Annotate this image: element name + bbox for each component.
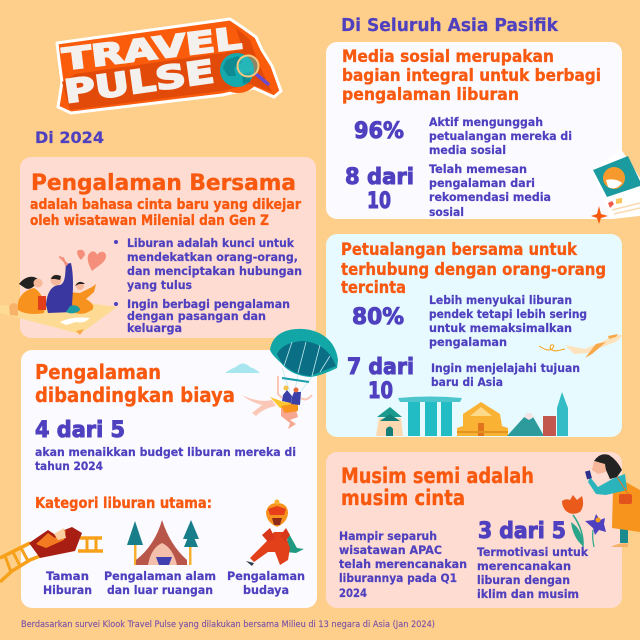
stat: 7 dari 10: 10 <box>368 379 393 404</box>
stat description: 3 dari 5: Termotivasi untuk <box>477 545 588 559</box>
panel heading: bagian integral untuk berbagi <box>342 66 601 86</box>
panel heading: oleh wisatawan Milenial dan Gen Z <box>30 213 269 229</box>
stat description: 80%: pengalaman <box>429 335 507 349</box>
label: Pengalaman budaya: budaya <box>243 583 289 597</box>
footer source note: Berdasarkan survei Klook Travel Pulse yang dilakukan bersama Milieu di 13 negara di Asia (Jan 2024) <box>21 620 435 630</box>
panel: Musim semi <box>326 452 640 608</box>
panel heading: pengalaman liburan <box>342 85 519 105</box>
text block: Hampir separuh <box>339 529 467 600</box>
icon: roller coaster <box>0 527 103 582</box>
heading: Di 2024: Di 2024 <box>35 128 104 147</box>
logo: Travel Pulse: PULSE <box>62 52 217 111</box>
stat description: 96% <box>429 115 572 157</box>
stat description: 3 dari 5: merencanakan <box>477 559 571 573</box>
bullet list: dengan pasangan dan <box>127 309 266 323</box>
panel heading: tercinta <box>341 278 406 298</box>
stat: 80%: 80% <box>352 305 404 330</box>
stat description: 3 dari 5: iklim dan musim <box>477 587 579 601</box>
stat description: akan menaikkan budget liburan mereka di <box>35 445 296 459</box>
stat description: 7 dari 10 <box>431 361 580 389</box>
panel: Petualangan bersama <box>326 234 622 437</box>
bullet list: mendekatkan orang-orang, <box>127 250 298 264</box>
bullet list: keluarga <box>127 321 182 335</box>
cloud <box>225 364 260 373</box>
panel heading: terhubung dengan orang-orang <box>341 260 606 280</box>
logo: Travel Pulse: TRAVEL <box>61 21 244 78</box>
text block: Hampir separuh: 2024 <box>339 586 367 600</box>
icon: sparkle <box>591 206 608 224</box>
stat description: tahun 2024 <box>35 459 103 473</box>
stat description: 7 dari 10: baru di Asia <box>431 375 503 389</box>
icon: tent and trees <box>127 520 199 565</box>
illustration: parachute with tandem riders <box>242 329 338 429</box>
bullet list: yang tulus <box>127 278 192 292</box>
label: Taman Hiburan: Hiburan <box>43 583 92 597</box>
logo: Travel Pulse <box>57 19 281 113</box>
stat description: 80%: Lebih menyukai liburan <box>429 293 572 307</box>
illustration: flowers <box>562 495 606 547</box>
panel: Pengalaman dibandingkan biaya <box>0 350 317 608</box>
panel heading: Pengalaman <box>35 360 161 384</box>
panel heading: Musim semi adalah <box>341 464 534 488</box>
illustration: Asian landmarks skyline <box>376 392 568 436</box>
label: Pengalaman budaya: Pengalaman <box>227 569 305 583</box>
stat description: 80%: pendek tetapi lebih sering <box>429 307 587 321</box>
text block: Hampir separuh: liburannya pada Q1 <box>339 571 457 585</box>
stat description: 80%: untuk memaksimalkan <box>429 321 572 335</box>
panel heading <box>341 240 606 298</box>
text block: Hampir separuh: Hampir separuh <box>339 529 437 543</box>
stat: 8 dari 10 <box>345 165 414 214</box>
illustration: friends on a picnic blanket with hearts <box>0 250 117 335</box>
stat description: 96%: media sosial <box>429 143 506 157</box>
panel heading <box>35 360 235 407</box>
bullet list: Liburan adalah kunci untuk <box>127 236 294 250</box>
stat description: 8 dari 10 <box>429 162 551 219</box>
stat description: 7 dari 10: Ingin menjelajahi tujuan <box>431 361 580 375</box>
panel heading: adalah bahasa cinta baru yang dikejar <box>30 197 301 213</box>
panel: Pengalaman Bersama <box>0 157 316 338</box>
stat description: 80% <box>429 293 587 349</box>
label: Pengalaman alam dan luar ruangan: Pengalaman alam <box>104 569 216 583</box>
stat: 7 dari 10: 7 dari <box>347 355 414 380</box>
panel heading: Pengalaman Bersama <box>31 171 296 196</box>
stat: 3 dari 5: 3 dari 5 <box>478 519 566 544</box>
stat: 8 dari 10: 8 dari <box>345 165 414 190</box>
panel heading: dibandingkan biaya <box>35 383 235 407</box>
text block: Hampir separuh: wisatawan APAC <box>339 543 442 557</box>
stat description: 8 dari 10: sosial <box>429 205 464 219</box>
stat description: 8 dari 10: Telah memesan <box>429 162 527 176</box>
label: Pengalaman alam dan luar ruangan: dan luar ruangan <box>107 583 213 597</box>
stat description: 96%: Aktif mengunggah <box>429 115 543 129</box>
stat description: 96%: petualangan mereka di <box>429 129 572 143</box>
icon: lion dancer <box>246 500 304 566</box>
label: Taman Hiburan: Taman <box>46 569 89 583</box>
panel: Media sosial <box>326 42 640 224</box>
icon: social media post card <box>592 149 640 219</box>
stat: 7 dari 10 <box>347 355 414 404</box>
subheading: categories: Kategori liburan utama: <box>35 494 212 512</box>
panel heading <box>342 47 601 105</box>
panel heading: musim cinta <box>341 486 465 510</box>
bullet list <box>114 236 302 335</box>
stat description: 3 dari 5: liburan dengan <box>477 573 570 587</box>
panel heading: Media sosial merupakan <box>342 47 554 67</box>
panel heading: Petualangan bersama untuk <box>341 240 578 260</box>
text block: Hampir separuh: telah merencanakan <box>339 557 467 571</box>
stat description <box>35 445 296 473</box>
label: Pengalaman alam dan luar ruangan <box>104 569 216 597</box>
stat description: 8 dari 10: rekomendasi media <box>429 190 551 204</box>
label: Pengalaman budaya <box>227 569 305 597</box>
stat: 8 dari 10: 10 <box>367 189 391 214</box>
stat description: 3 dari 5 <box>477 545 588 601</box>
panel heading <box>30 171 301 229</box>
stat description: 8 dari 10: pengalaman dari <box>429 176 535 190</box>
stat: 96%: 96% <box>354 119 404 144</box>
panel heading <box>341 464 534 510</box>
illustration: woman taking a photo <box>585 454 640 547</box>
icon: airplane with trail <box>539 334 622 358</box>
bullet list: dan menciptakan hubungan <box>127 264 302 278</box>
heading: Di Seluruh Asia Pasifik: Di Seluruh Asia Pasifik <box>341 16 558 36</box>
bullet list: Ingin berbagi pengalaman <box>127 297 290 311</box>
label: Taman Hiburan <box>43 569 92 597</box>
stat: 4 dari 5: 4 dari 5 <box>35 418 125 443</box>
